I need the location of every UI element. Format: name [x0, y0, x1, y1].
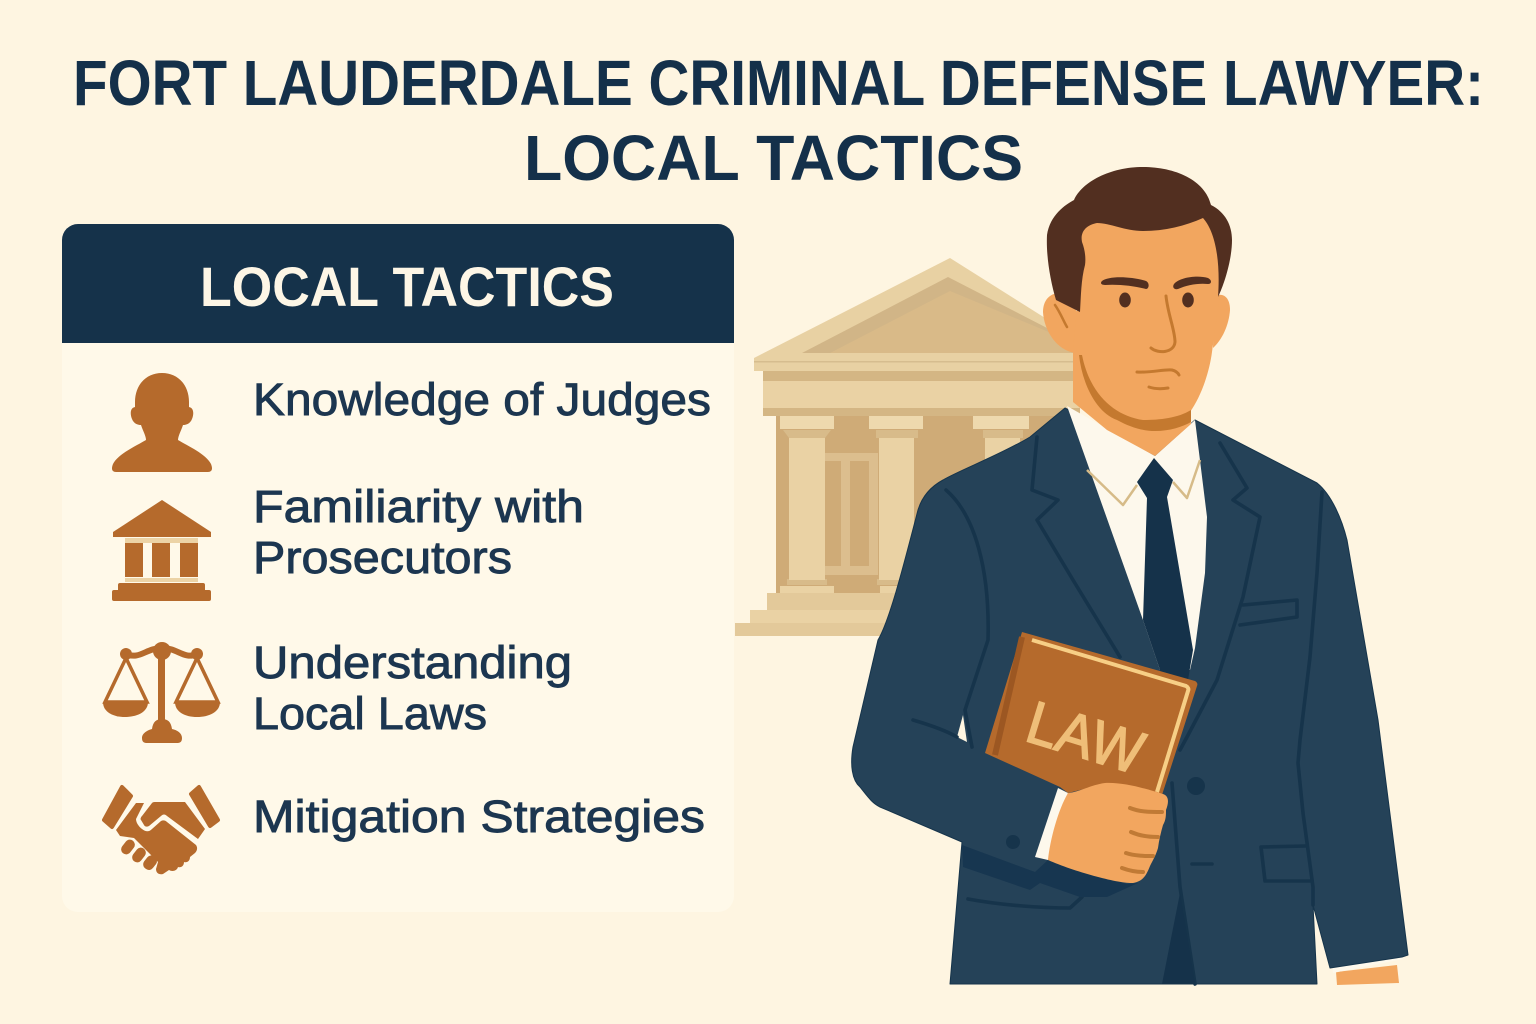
title: LOCAL TACTICS [524, 122, 1023, 194]
item: familiarity with prosecutors: Familiarity with [253, 481, 584, 532]
necktie [1137, 458, 1193, 690]
suit jacket [852, 408, 1408, 984]
ear detail [1055, 305, 1067, 327]
eyebrows [1101, 277, 1211, 289]
panel header [62, 224, 734, 343]
courthouse illustration [735, 258, 1080, 636]
title [73, 47, 1484, 194]
hair [1047, 167, 1232, 312]
jaw shadow [1079, 355, 1191, 431]
eyes [1119, 292, 1194, 308]
item: familiarity with prosecutors [253, 481, 584, 583]
icon: handshake [104, 787, 218, 874]
item: understanding local laws [253, 637, 572, 739]
right ear [1213, 295, 1230, 348]
right hand [1336, 965, 1399, 985]
panel background [62, 224, 734, 912]
law book [985, 632, 1197, 795]
item: knowledge of judges: Knowledge of Judges [253, 374, 711, 425]
item: mitigation strategies: Mitigation Strategies [253, 791, 705, 842]
nose, mouth [1137, 296, 1179, 389]
lower fold shadow [1162, 893, 1195, 984]
law book: LAW [1019, 688, 1152, 787]
item: understanding local laws: Local Laws [253, 688, 487, 739]
shirt cuff [1035, 788, 1068, 860]
collar trim [1087, 460, 1200, 505]
gap between arm and torso [957, 715, 967, 742]
icon: scales [103, 642, 220, 743]
under-arm shadow [962, 845, 1138, 897]
neck and face [1073, 215, 1220, 456]
icon: person [112, 373, 212, 472]
hand holding book [1048, 783, 1168, 883]
jacket lapels and seams [913, 437, 1322, 984]
right shirt cuff [1332, 953, 1403, 973]
icon: courthouse [112, 500, 211, 601]
left ear [1043, 293, 1085, 353]
item: understanding local laws: Understanding [253, 637, 572, 688]
item: familiarity with prosecutors: Prosecutors [253, 532, 512, 583]
panel header: LOCAL TACTICS [200, 255, 614, 318]
jacket buttons [1006, 777, 1205, 849]
shirt [1067, 406, 1207, 670]
panel: local tactics [62, 224, 734, 912]
lawyer figure [852, 167, 1408, 985]
